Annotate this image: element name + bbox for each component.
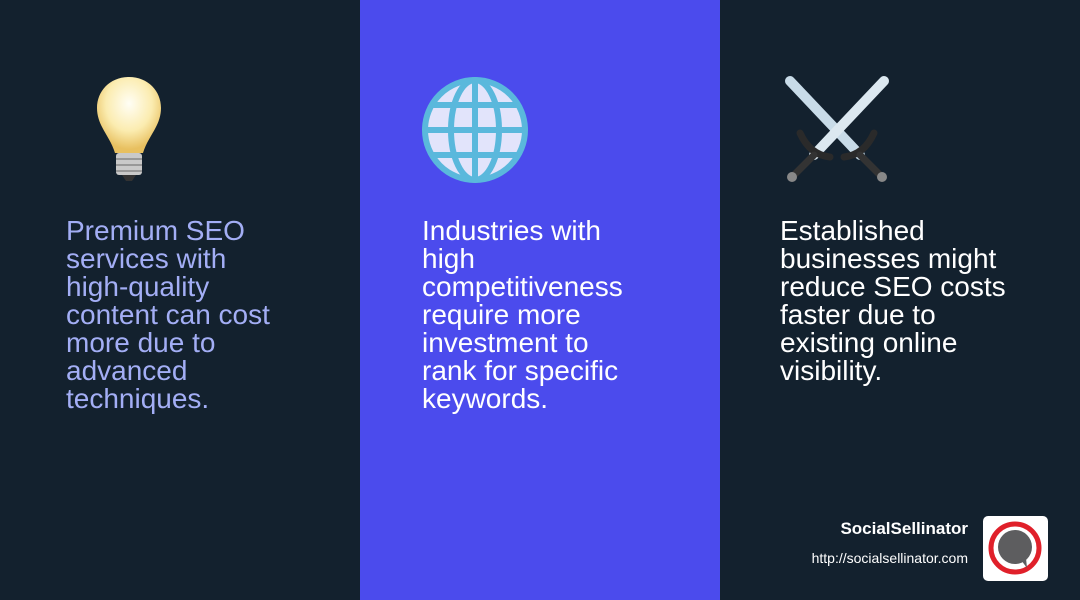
text: premium: advanced	[66, 355, 187, 386]
text: premium: Premium SEO	[66, 215, 245, 246]
text: industries: high	[422, 243, 475, 274]
brand: name: SocialSellinator	[840, 519, 968, 538]
text: industries: keywords.	[422, 383, 548, 414]
text: established: reduce SEO costs	[780, 271, 1006, 302]
text: premium: more due to	[66, 327, 215, 358]
logo	[983, 516, 1048, 581]
text: industries: require more	[422, 299, 581, 330]
text: established: existing online	[780, 327, 957, 358]
text: premium: content can cost	[66, 299, 270, 330]
text: established: visibility.	[780, 355, 882, 386]
icon: crossed swords	[785, 76, 889, 182]
text: industries	[422, 215, 623, 414]
text: premium: high-quality	[66, 271, 209, 302]
brand: url: http://socialsellinator.com	[812, 550, 968, 566]
text: premium	[66, 215, 270, 414]
text: premium: techniques.	[66, 383, 209, 414]
icon: globe	[422, 77, 528, 183]
text: established: faster due to	[780, 299, 936, 330]
panel: left	[0, 0, 360, 600]
text: established: Established	[780, 215, 925, 246]
panel: middle	[360, 0, 720, 600]
text: premium: services with	[66, 243, 226, 274]
text: established: businesses might	[780, 243, 996, 274]
text: industries: investment to	[422, 327, 589, 358]
text: industries: Industries with	[422, 215, 601, 246]
text: industries: competitiveness	[422, 271, 623, 302]
text: industries: rank for specific	[422, 355, 618, 386]
text: established	[780, 215, 1006, 386]
icon: light bulb	[97, 77, 161, 181]
panel: right	[720, 0, 1080, 600]
